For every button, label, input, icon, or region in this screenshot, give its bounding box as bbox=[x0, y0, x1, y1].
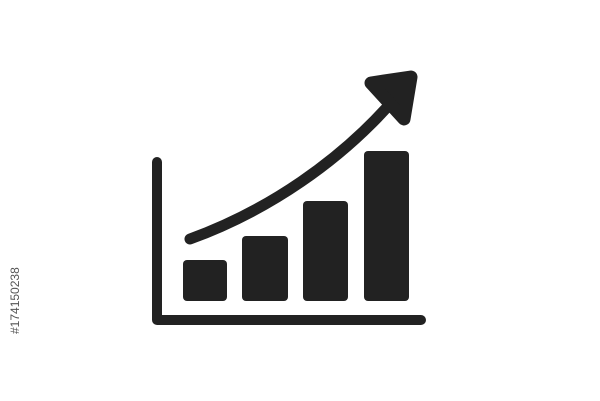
bars bbox=[183, 151, 409, 301]
axes bbox=[157, 162, 421, 320]
arrow bbox=[190, 77, 411, 239]
watermark id text: #174150238 bbox=[8, 267, 22, 334]
